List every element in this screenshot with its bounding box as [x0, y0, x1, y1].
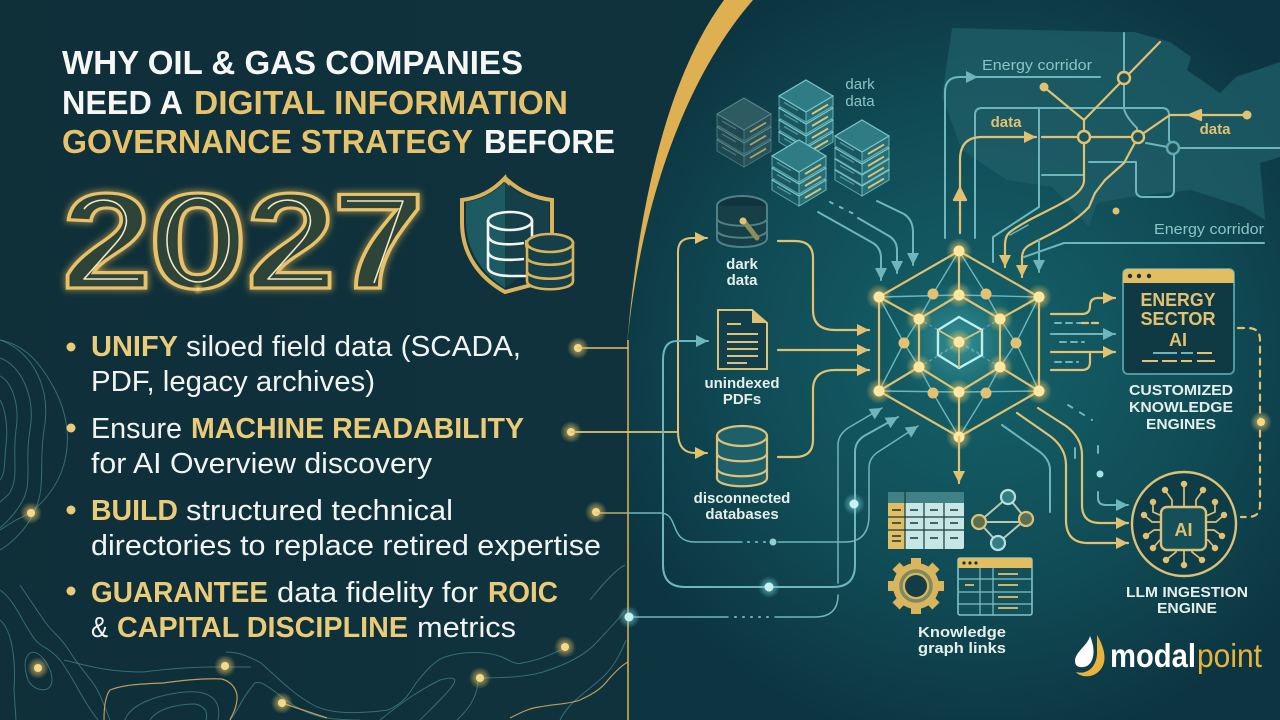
year 2027 neon numerals: 0 — [148, 165, 248, 317]
bullet: machine readability: Ensure — [91, 413, 182, 445]
label: customized knowledge engines: KNOWLEDGE — [1129, 399, 1233, 416]
label: knowledge graph links: Knowledge — [918, 624, 1006, 641]
teal spokes — [879, 251, 1039, 437]
logo: modalpoint — [1075, 635, 1262, 676]
bullet: guarantee: data fidelity for — [277, 577, 478, 609]
bullet: build: BUILD — [91, 495, 178, 527]
label: PDFs: PDFs — [723, 391, 761, 408]
year 2027 neon numerals: 2 — [62, 165, 152, 317]
label: disconnected: disconnected — [694, 490, 790, 507]
logo: modalpoint: modal — [1110, 637, 1196, 674]
bullet: unify: siloed field data (SCADA, — [186, 331, 521, 363]
title: WHY OIL & GAS COMPANIES — [62, 44, 523, 81]
label: data: data — [727, 272, 758, 289]
hub nodes — [866, 238, 1052, 450]
icon: dark data database — [717, 196, 767, 247]
teal corridor lines — [945, 33, 1280, 262]
bullet: machine readability: MACHINE READABILITY — [191, 413, 524, 445]
icon: gear — [888, 558, 944, 614]
label: LLM ingestion engine: ENGINE — [1157, 600, 1217, 617]
arrow to knowledge graph — [958, 437, 960, 483]
label: dark data: dark — [726, 256, 758, 273]
icon: unindexed PDF document — [718, 310, 767, 369]
year 2027 neon numerals: 7 — [332, 165, 425, 317]
bullet: build: structured technical — [186, 495, 453, 527]
central knowledge hub — [866, 238, 1052, 450]
year 2027 neon numerals: 7 — [332, 165, 425, 317]
icon: browser table — [958, 558, 1032, 615]
label: dark data: data — [845, 93, 875, 110]
map labels: data — [1200, 121, 1231, 138]
gold corridor lines — [954, 42, 1247, 277]
stack: dim left — [717, 98, 771, 167]
title: BEFORE — [484, 123, 615, 160]
label: customized knowledge engines: ENGINES — [1146, 416, 1216, 433]
bullet: unify: UNIFY — [91, 331, 178, 363]
map silhouette — [942, 28, 1280, 227]
title — [62, 44, 615, 160]
bullet: guarantee: CAPITAL DISCIPLINE — [117, 612, 408, 644]
map labels: data — [991, 114, 1022, 131]
icon: drop — [1075, 635, 1105, 676]
label: LLM ingestion engine — [1126, 584, 1248, 617]
logo: modalpoint: point — [1197, 637, 1262, 674]
label: databases: databases — [705, 506, 779, 523]
bullet: guarantee: ROIC — [488, 577, 558, 609]
stack: top centre — [779, 80, 833, 158]
gold arc divider — [627, 0, 753, 720]
label: dark data — [845, 76, 875, 110]
gold hexagon frames — [879, 251, 1039, 437]
hub glow — [897, 280, 1021, 404]
year 2027 neon numerals: 2 — [246, 165, 336, 317]
map nodes — [1040, 72, 1252, 214]
glowing dots on contours — [20, 502, 576, 714]
map labels: Energy corridor — [1154, 221, 1264, 238]
year 2027 neon numerals: 2 — [62, 165, 152, 317]
year 2027 neon numerals: 0 — [148, 165, 248, 317]
label: customized knowledge engines — [1129, 382, 1233, 433]
label: dark data: dark — [845, 76, 875, 93]
panel: energy sector AI window — [1123, 269, 1234, 374]
bullet list — [66, 331, 601, 644]
left source arrows — [663, 238, 869, 457]
bullet: guarantee: GUARANTEE — [91, 577, 268, 609]
title: GOVERNANCE STRATEGY — [62, 123, 473, 160]
map labels: Energy corridor — [982, 57, 1092, 74]
label: customized knowledge engines: CUSTOMIZED — [1129, 382, 1233, 399]
bullet: guarantee — [66, 577, 558, 644]
icon: data table — [888, 492, 964, 549]
dashed link between engines — [1238, 328, 1272, 517]
icon: shield with databases — [462, 178, 573, 292]
bullet: machine readability: for AI Overview discovery — [91, 448, 433, 480]
arrows from servers into hub — [818, 201, 1039, 280]
panel: energy sector AI window: AI — [1169, 330, 1187, 350]
label: knowledge graph links — [918, 624, 1006, 657]
label: knowledge graph links: graph links — [918, 640, 1006, 657]
topographic contour lines — [0, 340, 628, 720]
title: NEED A — [62, 84, 183, 121]
icon: LLM AI chip circle: AI — [1174, 520, 1192, 540]
year 2027 neon numerals — [62, 165, 425, 317]
title: DIGITAL INFORMATION — [194, 84, 568, 121]
map with energy corridors — [942, 28, 1280, 277]
connectors from bullets to diagram — [560, 337, 918, 628]
server stacks: dark data — [717, 76, 889, 206]
bullet: build: directories to replace retired expertise — [91, 530, 601, 562]
icon: graph network — [972, 490, 1033, 550]
stack: front — [772, 140, 826, 206]
bullet: unify — [66, 331, 521, 398]
bright inner hexagon — [938, 317, 982, 368]
arrows into LLM engine — [1002, 405, 1128, 543]
panel: energy sector AI window: SECTOR — [1140, 309, 1216, 329]
label: LLM ingestion engine: LLM INGESTION — [1126, 584, 1248, 601]
icon: LLM AI chip circle — [1132, 472, 1236, 576]
bullet: machine readability — [66, 413, 524, 480]
bullet: unify: PDF, legacy archives) — [91, 366, 375, 398]
bullet: build — [66, 495, 601, 562]
panel: energy sector AI window: ENERGY — [1140, 290, 1216, 310]
bullet: guarantee: metrics — [417, 612, 516, 644]
year 2027 neon numerals: 2 — [246, 165, 336, 317]
label: unindexed: unindexed — [704, 375, 780, 392]
arrows to customized knowledge engine — [1051, 298, 1115, 370]
bullet: guarantee: & — [91, 612, 108, 644]
icon: disconnected database — [717, 426, 767, 486]
map labels — [982, 57, 1264, 238]
stack: right — [835, 120, 889, 196]
